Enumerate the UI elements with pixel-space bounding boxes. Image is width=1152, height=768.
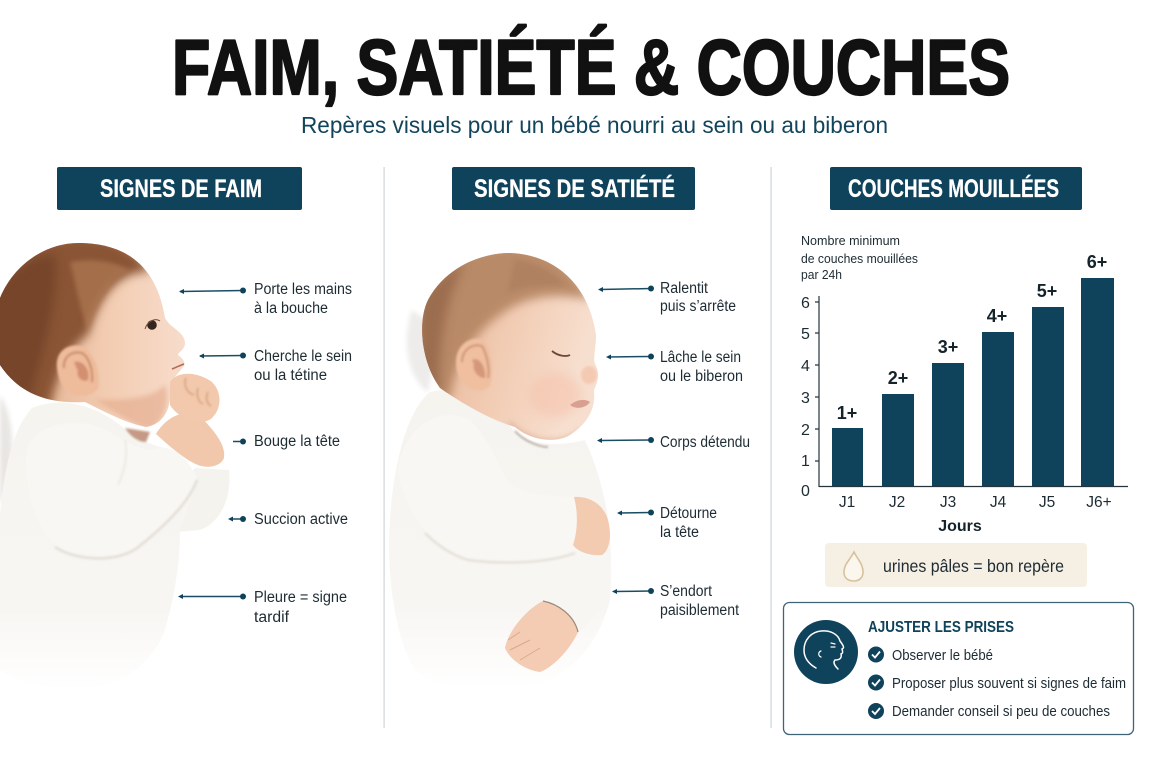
lower hand	[156, 413, 224, 467]
arm sleeve	[398, 415, 578, 562]
bars	[832, 278, 1114, 486]
callout: ralentit: puis s’arrête	[660, 298, 736, 315]
callout: cherche le sein: Cherche le sein	[254, 348, 352, 365]
hair	[422, 253, 587, 440]
suit body	[389, 390, 611, 690]
callout: porte les mains	[179, 281, 352, 317]
callout: porte les mains: Porte les mains	[254, 281, 352, 298]
callout: porte les mains: à la bouche	[254, 300, 328, 317]
callout: ralentit: Ralentit	[660, 280, 709, 297]
mouth	[570, 400, 590, 408]
closed eye	[552, 351, 570, 356]
callout: lâche le sein: Lâche le sein	[660, 349, 741, 366]
callout: corps détendu	[597, 434, 750, 451]
lower sleeve	[545, 563, 608, 632]
x axis labels: J1	[839, 494, 855, 511]
x axis labels: J5	[1039, 494, 1055, 511]
icon: drop	[844, 552, 863, 581]
bar values: 5+	[1037, 281, 1057, 301]
head	[422, 253, 598, 440]
item: proposer: Proposer plus souvent si signes de faim	[892, 675, 1126, 692]
callouts: satiety signs	[597, 280, 750, 619]
chart title: de couches mouillées	[801, 251, 918, 266]
x axis labels: J3	[940, 494, 956, 511]
collar shadow	[515, 431, 548, 447]
y axis: 0	[801, 483, 810, 500]
callout: détourne la tête: la tête	[660, 524, 699, 541]
callout: ralentit	[598, 280, 736, 315]
callout: lâche le sein	[606, 349, 743, 385]
ear	[57, 345, 99, 396]
upper fist	[170, 374, 220, 422]
callout: s'endort: paisiblement	[660, 602, 740, 619]
nose	[581, 366, 597, 384]
item: demander: Demander conseil si peu de couches	[892, 703, 1110, 720]
back sleeve	[170, 468, 230, 532]
x axis labels: J4	[990, 494, 1007, 511]
bar values	[837, 252, 1107, 423]
callout: pleure: tardif	[254, 609, 290, 626]
subtitle: Repères visuels pour un bébé nourri au sein ou au biberon	[301, 112, 888, 138]
heading: signes de faim	[57, 167, 302, 210]
illustration: hungry baby	[0, 243, 230, 636]
bar values: 3+	[938, 337, 958, 357]
callout: pale urine: urines pâles = bon repère	[883, 556, 1064, 576]
x axis labels: J6+	[1086, 494, 1112, 511]
heading: couches mouillées	[830, 167, 1082, 210]
y axis: 3	[801, 390, 810, 407]
callout: s'endort	[612, 583, 740, 619]
ear	[456, 339, 492, 391]
callout: pleure	[178, 589, 347, 626]
callout: corps détendu: Corps détendu	[660, 434, 750, 451]
neck shadow	[125, 428, 150, 442]
y axis	[801, 295, 819, 500]
chart title	[801, 233, 918, 282]
bar chart: wet diapers	[801, 233, 1128, 535]
callout: s'endort: S’endort	[660, 583, 713, 600]
heading: signes de satiété: SIGNES DE SATIÉTÉ	[474, 174, 675, 203]
eye	[147, 320, 157, 330]
cheek	[529, 373, 581, 417]
chart title: Nombre minimum	[801, 233, 900, 248]
callout: lâche le sein: ou le biberon	[660, 368, 743, 385]
upper fist	[573, 497, 610, 555]
y axis: 6	[801, 295, 810, 312]
y axis: 4	[801, 358, 810, 375]
head	[0, 243, 185, 427]
x axis title: Jours	[938, 518, 982, 535]
hair	[0, 235, 167, 430]
y axis: 2	[801, 422, 810, 439]
illustration: sleeping baby	[389, 245, 611, 690]
callout: succion active: Succion active	[254, 511, 348, 528]
callout: bouge la tête: Bouge la tête	[254, 433, 340, 450]
panel heading: AJUSTER LES PRISES	[868, 619, 1014, 636]
heading: signes de faim: SIGNES DE FAIM	[100, 175, 262, 203]
bar values: 4+	[987, 306, 1007, 326]
bar values: 6+	[1087, 252, 1107, 272]
bar values: 1+	[837, 403, 857, 423]
mouth	[172, 364, 184, 369]
placket	[539, 448, 541, 492]
icon: baby face	[794, 620, 858, 684]
callout: détourne la tête: Détourne	[660, 505, 717, 522]
callouts: hunger signs	[178, 281, 352, 626]
callout: pleure: Pleure = signe	[254, 589, 347, 606]
item: observer: Observer le bébé	[892, 647, 993, 664]
x axis labels: J2	[889, 494, 905, 511]
bar values: 2+	[888, 368, 908, 388]
panel: ajuster les prises	[784, 602, 1134, 734]
callout: cherche le sein	[199, 348, 352, 384]
lower hand	[505, 601, 578, 672]
y axis: 1	[801, 453, 810, 470]
callout: détourne la tête	[617, 505, 717, 541]
sleeve arm	[26, 423, 197, 557]
callout: cherche le sein: ou la tétine	[254, 367, 327, 384]
chart title: par 24h	[801, 267, 842, 282]
x axis labels	[839, 494, 1112, 511]
heading: couches mouillées: COUCHES MOUILLÉES	[848, 174, 1059, 203]
y axis: 5	[801, 326, 810, 343]
callout: pale urine	[825, 543, 1087, 587]
heading: signes de satiété	[452, 167, 695, 210]
suit body	[0, 403, 198, 690]
